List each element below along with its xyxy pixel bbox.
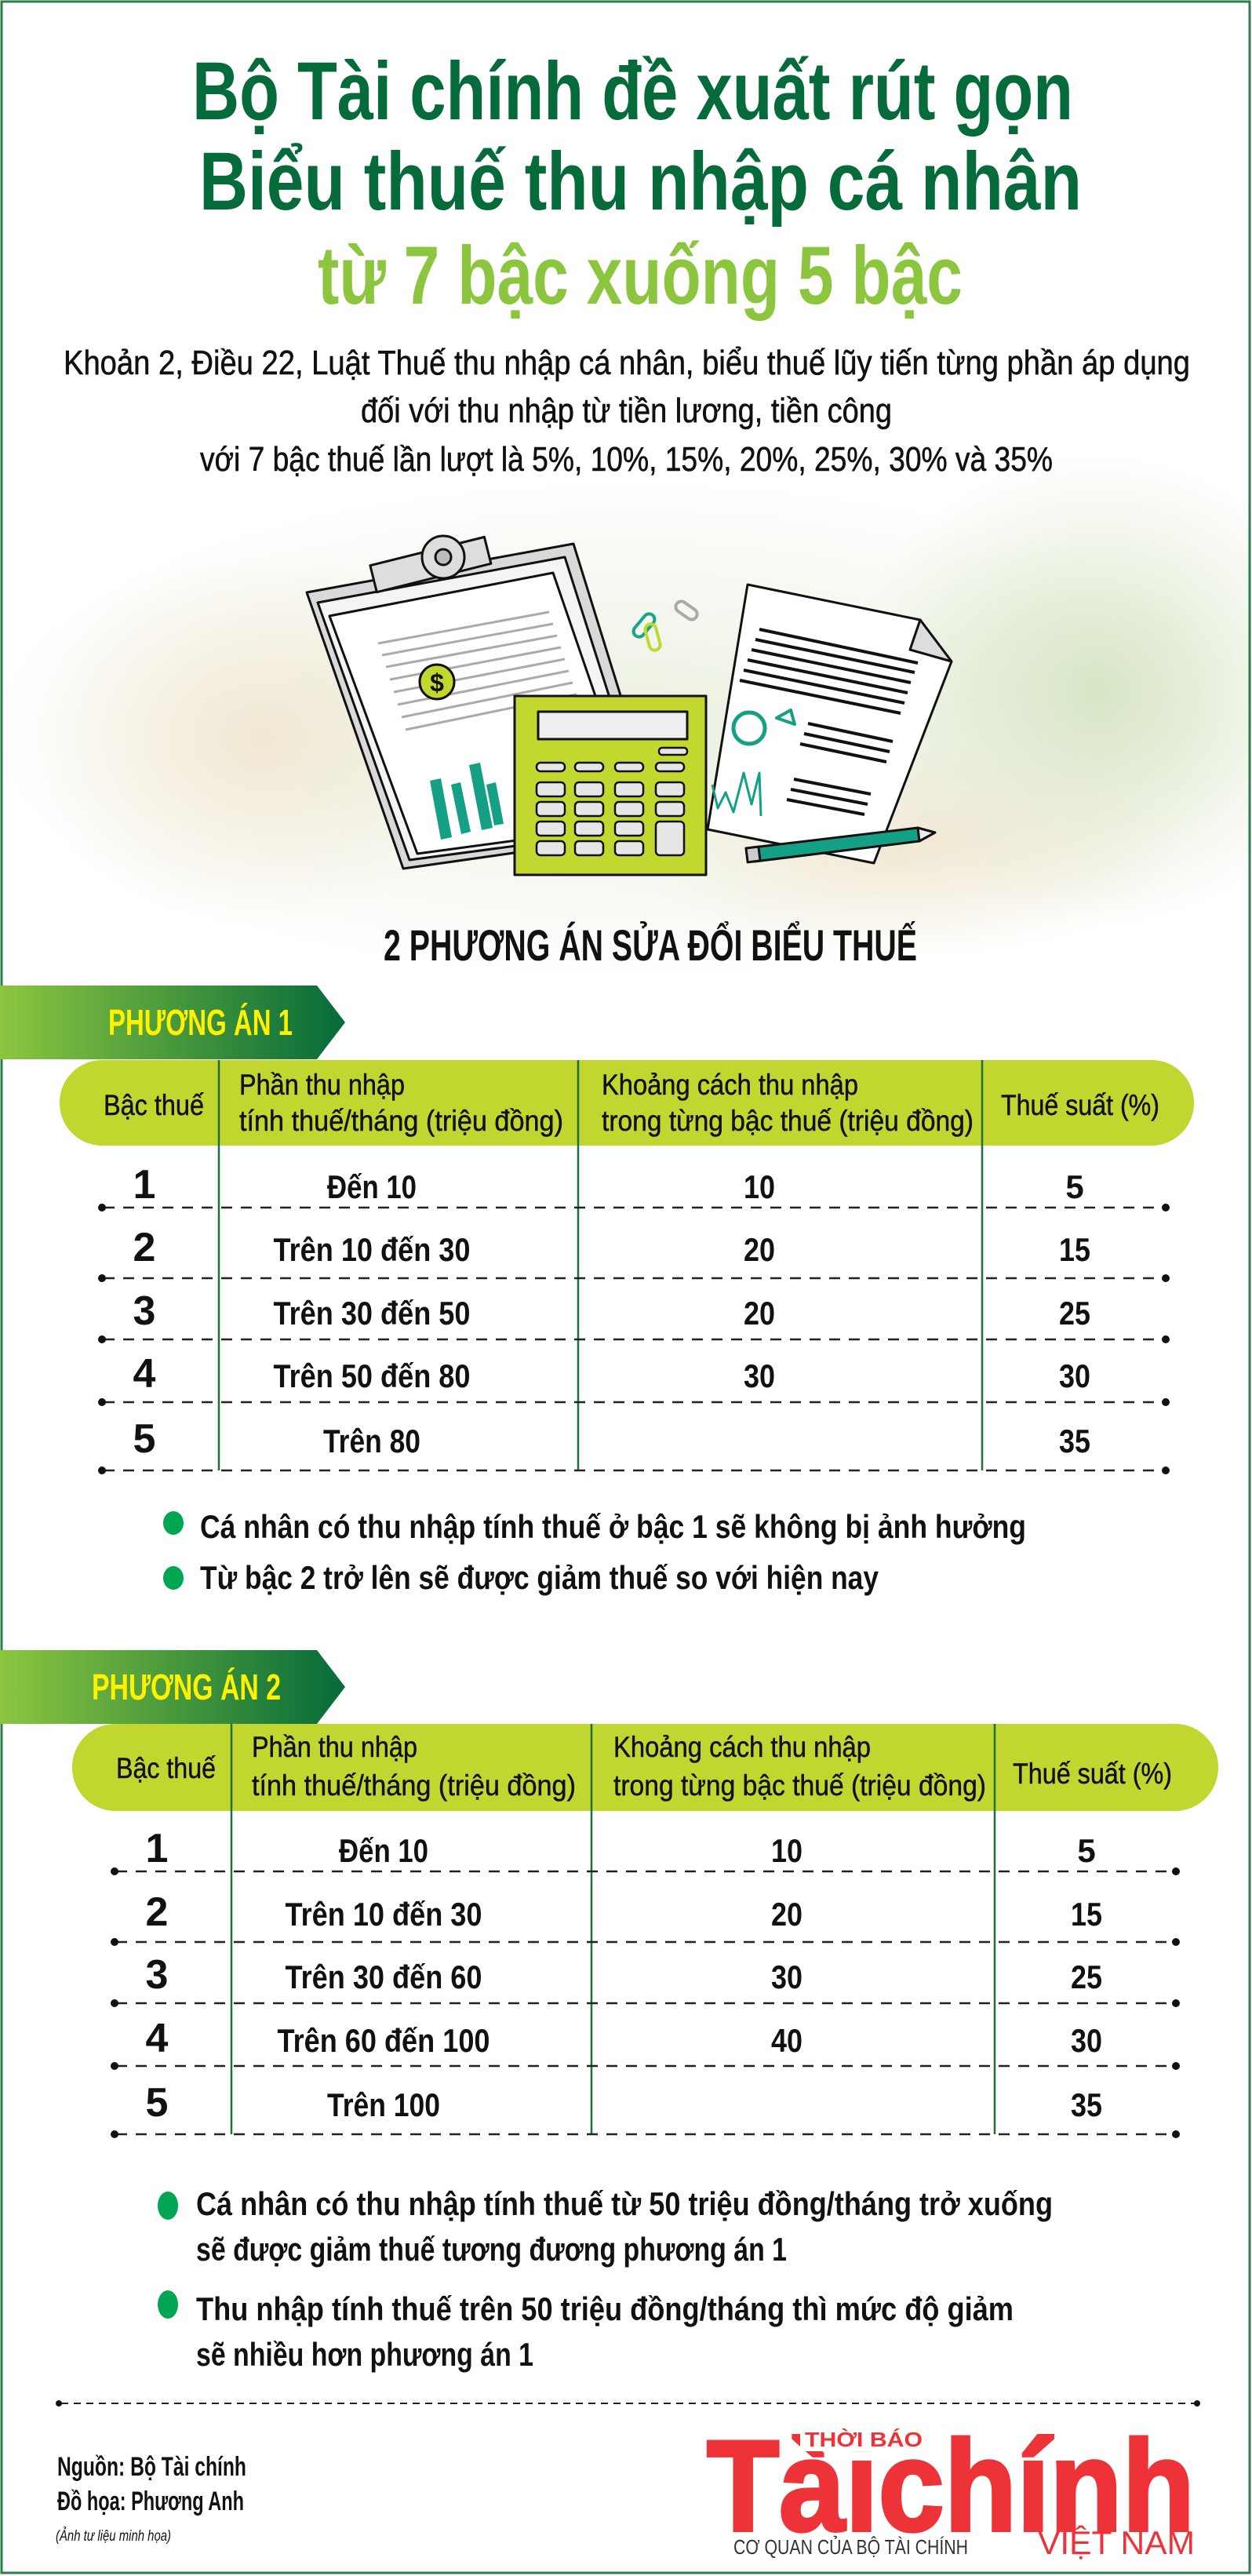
table rows: Trên 10 đến 30 xyxy=(286,1896,482,1933)
icon: document with charts xyxy=(708,585,952,863)
notes: Phương án 2: Thu nhập tính thuế trên 50 triệu đồng/tháng thì mức độ giảm xyxy=(196,2290,1014,2327)
table header: trong từng bậc thuế (triệu đồng) xyxy=(613,1769,986,1802)
table rows: Trên 60 đến 100 xyxy=(278,2022,490,2059)
table rows: 40 xyxy=(771,2022,803,2059)
table rows: 2 xyxy=(133,1225,155,1270)
banner: Phương án 2: PHƯƠNG ÁN 2 xyxy=(92,1667,281,1707)
intro text: với 7 bậc thuế lần lượt là 5%, 10%, 15%, 20%, 25%, 30% và 35% xyxy=(200,440,1053,479)
banner: Phương án 1: PHƯƠNG ÁN 1 xyxy=(108,1002,293,1043)
credits: (Ảnh tư liệu minh họa) xyxy=(56,2527,171,2545)
notes: Phương án 2: sẽ nhiều hơn phương án 1 xyxy=(196,2336,533,2373)
logo: Thời báo Tài chính Việt Nam: Tàichính xyxy=(707,2414,1195,2558)
notes: Phương án 2: Cá nhân có thu nhập tính thuế từ 50 triệu đồng/tháng trở xuống xyxy=(196,2185,1053,2222)
table rows: Trên 10 đến 30 xyxy=(273,1231,471,1268)
notes: Phương án 1 xyxy=(163,1508,1026,1596)
table rows: 10 xyxy=(744,1168,775,1205)
table rows xyxy=(133,1162,1090,1462)
table header: Bậc thuế xyxy=(116,1752,216,1784)
table: Phương án 1 xyxy=(60,1060,1194,1474)
notes: Phương án 1: Từ bậc 2 trở lên sẽ được giảm thuế so với hiện nay xyxy=(200,1559,879,1596)
table rows xyxy=(146,1826,1102,2126)
table header: trong từng bậc thuế (triệu đồng) xyxy=(602,1105,974,1137)
table rows: 3 xyxy=(146,1952,168,1998)
intro text: đối với thu nhập từ tiền lương, tiền công xyxy=(361,392,892,430)
table rows: 5 xyxy=(133,1416,155,1462)
table header: tính thuế/tháng (triệu đồng) xyxy=(252,1769,576,1802)
credits xyxy=(56,2452,246,2545)
table rows: Trên 80 xyxy=(323,1423,420,1459)
table header: Bậc thuế xyxy=(104,1089,204,1121)
table header: Khoảng cách thu nhập xyxy=(613,1731,871,1763)
credits: Đồ họa: Phương Anh xyxy=(57,2487,244,2516)
icon: calculator xyxy=(515,696,706,875)
table header: Phần thu nhập xyxy=(252,1731,417,1763)
title: Biểu thuế thu nhập cá nhân xyxy=(199,136,1082,228)
icon: clipboard: $ xyxy=(430,669,444,697)
table rows: 10 xyxy=(771,1832,803,1869)
table header: Phần thu nhập xyxy=(239,1069,405,1101)
banner: Phương án 1 xyxy=(0,986,345,1059)
illustration: tax documents xyxy=(307,536,952,875)
table rows: 35 xyxy=(1071,2086,1102,2123)
table rows: 5 xyxy=(1065,1168,1084,1205)
credits: Nguồn: Bộ Tài chính xyxy=(57,2452,246,2482)
table rows: 20 xyxy=(744,1231,775,1268)
table rows: Đến 10 xyxy=(339,1832,428,1869)
table header: Thuế suất (%) xyxy=(1001,1089,1159,1121)
table rows: 30 xyxy=(744,1357,775,1394)
table rows: 15 xyxy=(1071,1896,1102,1933)
table rows: 30 xyxy=(1059,1357,1090,1394)
table rows: 4 xyxy=(133,1351,156,1397)
table rows: 20 xyxy=(744,1295,775,1332)
icon: paper clips xyxy=(631,599,699,651)
intro text xyxy=(64,344,1190,479)
table header: Khoảng cách thu nhập xyxy=(602,1069,858,1101)
table header: Thuế suất (%) xyxy=(1013,1758,1172,1790)
table rows: 1 xyxy=(146,1826,168,1871)
table rows: 30 xyxy=(771,1958,803,1995)
table rows: Đến 10 xyxy=(327,1168,417,1205)
table rows: 5 xyxy=(1077,1832,1096,1869)
section heading: 2 PHƯƠNG ÁN SỬA ĐỔI BIỂU THUẾ xyxy=(384,920,917,970)
table rows: Trên 30 đến 60 xyxy=(286,1958,482,1995)
table rows: Trên 50 đến 80 xyxy=(273,1357,471,1394)
notes: Phương án 2: sẽ được giảm thuế tương đương phương án 1 xyxy=(196,2231,787,2268)
table rows: 35 xyxy=(1059,1423,1090,1459)
icon: pencil xyxy=(746,828,935,862)
notes: Phương án 2 xyxy=(158,2185,1053,2373)
table header xyxy=(60,1060,1194,1146)
table rows: 15 xyxy=(1059,1231,1090,1268)
background photo (blurred) xyxy=(0,455,1252,981)
table rows: 4 xyxy=(146,2016,169,2061)
table rows: Trên 100 xyxy=(327,2086,440,2123)
notes: Phương án 1: Cá nhân có thu nhập tính thuế ở bậc 1 sẽ không bị ảnh hưởng xyxy=(200,1508,1026,1545)
title: từ 7 bậc xuống 5 bậc xyxy=(318,230,963,322)
logo: Thời báo Tài chính Việt Nam: THỜI BÁO xyxy=(805,2428,923,2451)
logo: Thời báo Tài chính Việt Nam: VIỆT NAM xyxy=(1038,2524,1195,2561)
table rows: 3 xyxy=(133,1288,155,1334)
table rows: 1 xyxy=(133,1162,155,1208)
icon: clipboard xyxy=(307,536,663,869)
table: Phương án 2 xyxy=(72,1724,1218,2138)
table rows: 30 xyxy=(1071,2022,1102,2059)
table header xyxy=(72,1724,1218,1811)
table rows: 25 xyxy=(1071,1958,1102,1995)
table rows: 2 xyxy=(146,1889,168,1935)
banner: Phương án 2 xyxy=(0,1650,345,1724)
table rows: 5 xyxy=(146,2080,168,2126)
logo: Thời báo Tài chính Việt Nam: CƠ QUAN CỦA BỘ TÀI CHÍNH xyxy=(733,2534,968,2559)
table rows: 20 xyxy=(771,1896,803,1933)
table rows: 25 xyxy=(1059,1295,1090,1332)
table rows: Trên 30 đến 50 xyxy=(273,1295,471,1332)
table header: tính thuế/tháng (triệu đồng) xyxy=(239,1105,563,1137)
title xyxy=(192,46,1082,322)
